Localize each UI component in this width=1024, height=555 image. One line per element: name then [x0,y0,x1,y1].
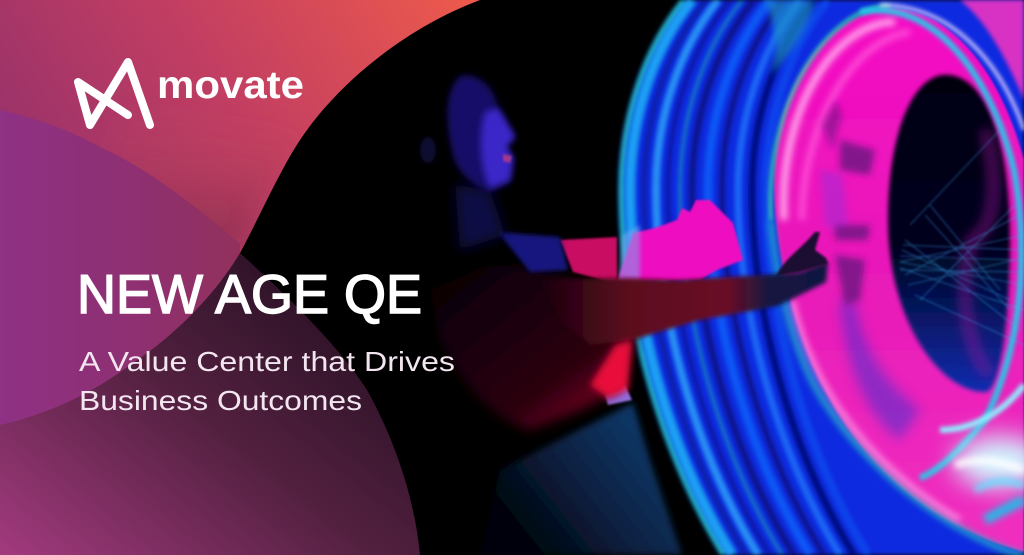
jacket collar [498,232,568,272]
face light [481,108,515,188]
ring highlights [784,22,895,220]
top-right pink [960,0,1024,100]
upper back sleeve [560,237,617,284]
ear [420,137,436,163]
torso [430,266,640,430]
pink ring [774,9,1024,552]
person [420,75,828,555]
ring lower blue mix [840,300,920,440]
logo wordmark: movate [157,64,304,107]
lips [503,154,512,163]
sleeve patch pale edge [618,225,640,282]
lower shadow on red [168,174,268,252]
light rays [900,130,1024,345]
upper gradient shape [0,0,480,425]
top teal streak [765,0,815,75]
subtitle [79,346,455,416]
logo [78,62,304,125]
arm [540,262,828,345]
chest highlight [590,340,632,398]
subtitle line 1: A Value Center that Drives [79,346,455,377]
ring rim green [770,6,890,220]
title: NEW AGE QE [77,263,422,325]
waist light [605,385,632,405]
purple shape [0,110,240,425]
logo mark [78,62,150,125]
lower dark shape [0,253,420,555]
subtitle line 2: Business Outcomes [79,385,362,416]
neck [455,185,505,250]
bright burst [940,385,1024,520]
ring rim lower [771,220,1024,555]
blurred hand marks [820,100,875,305]
light rings [618,0,1024,555]
magenta sleeve patch [617,200,743,282]
outer blue light trails [618,0,1024,555]
ring hole [888,75,1010,392]
jeans [480,403,682,555]
hand [776,232,828,276]
inner pink arc [965,130,994,375]
face [447,75,515,192]
outer cyan ring [860,10,1021,478]
